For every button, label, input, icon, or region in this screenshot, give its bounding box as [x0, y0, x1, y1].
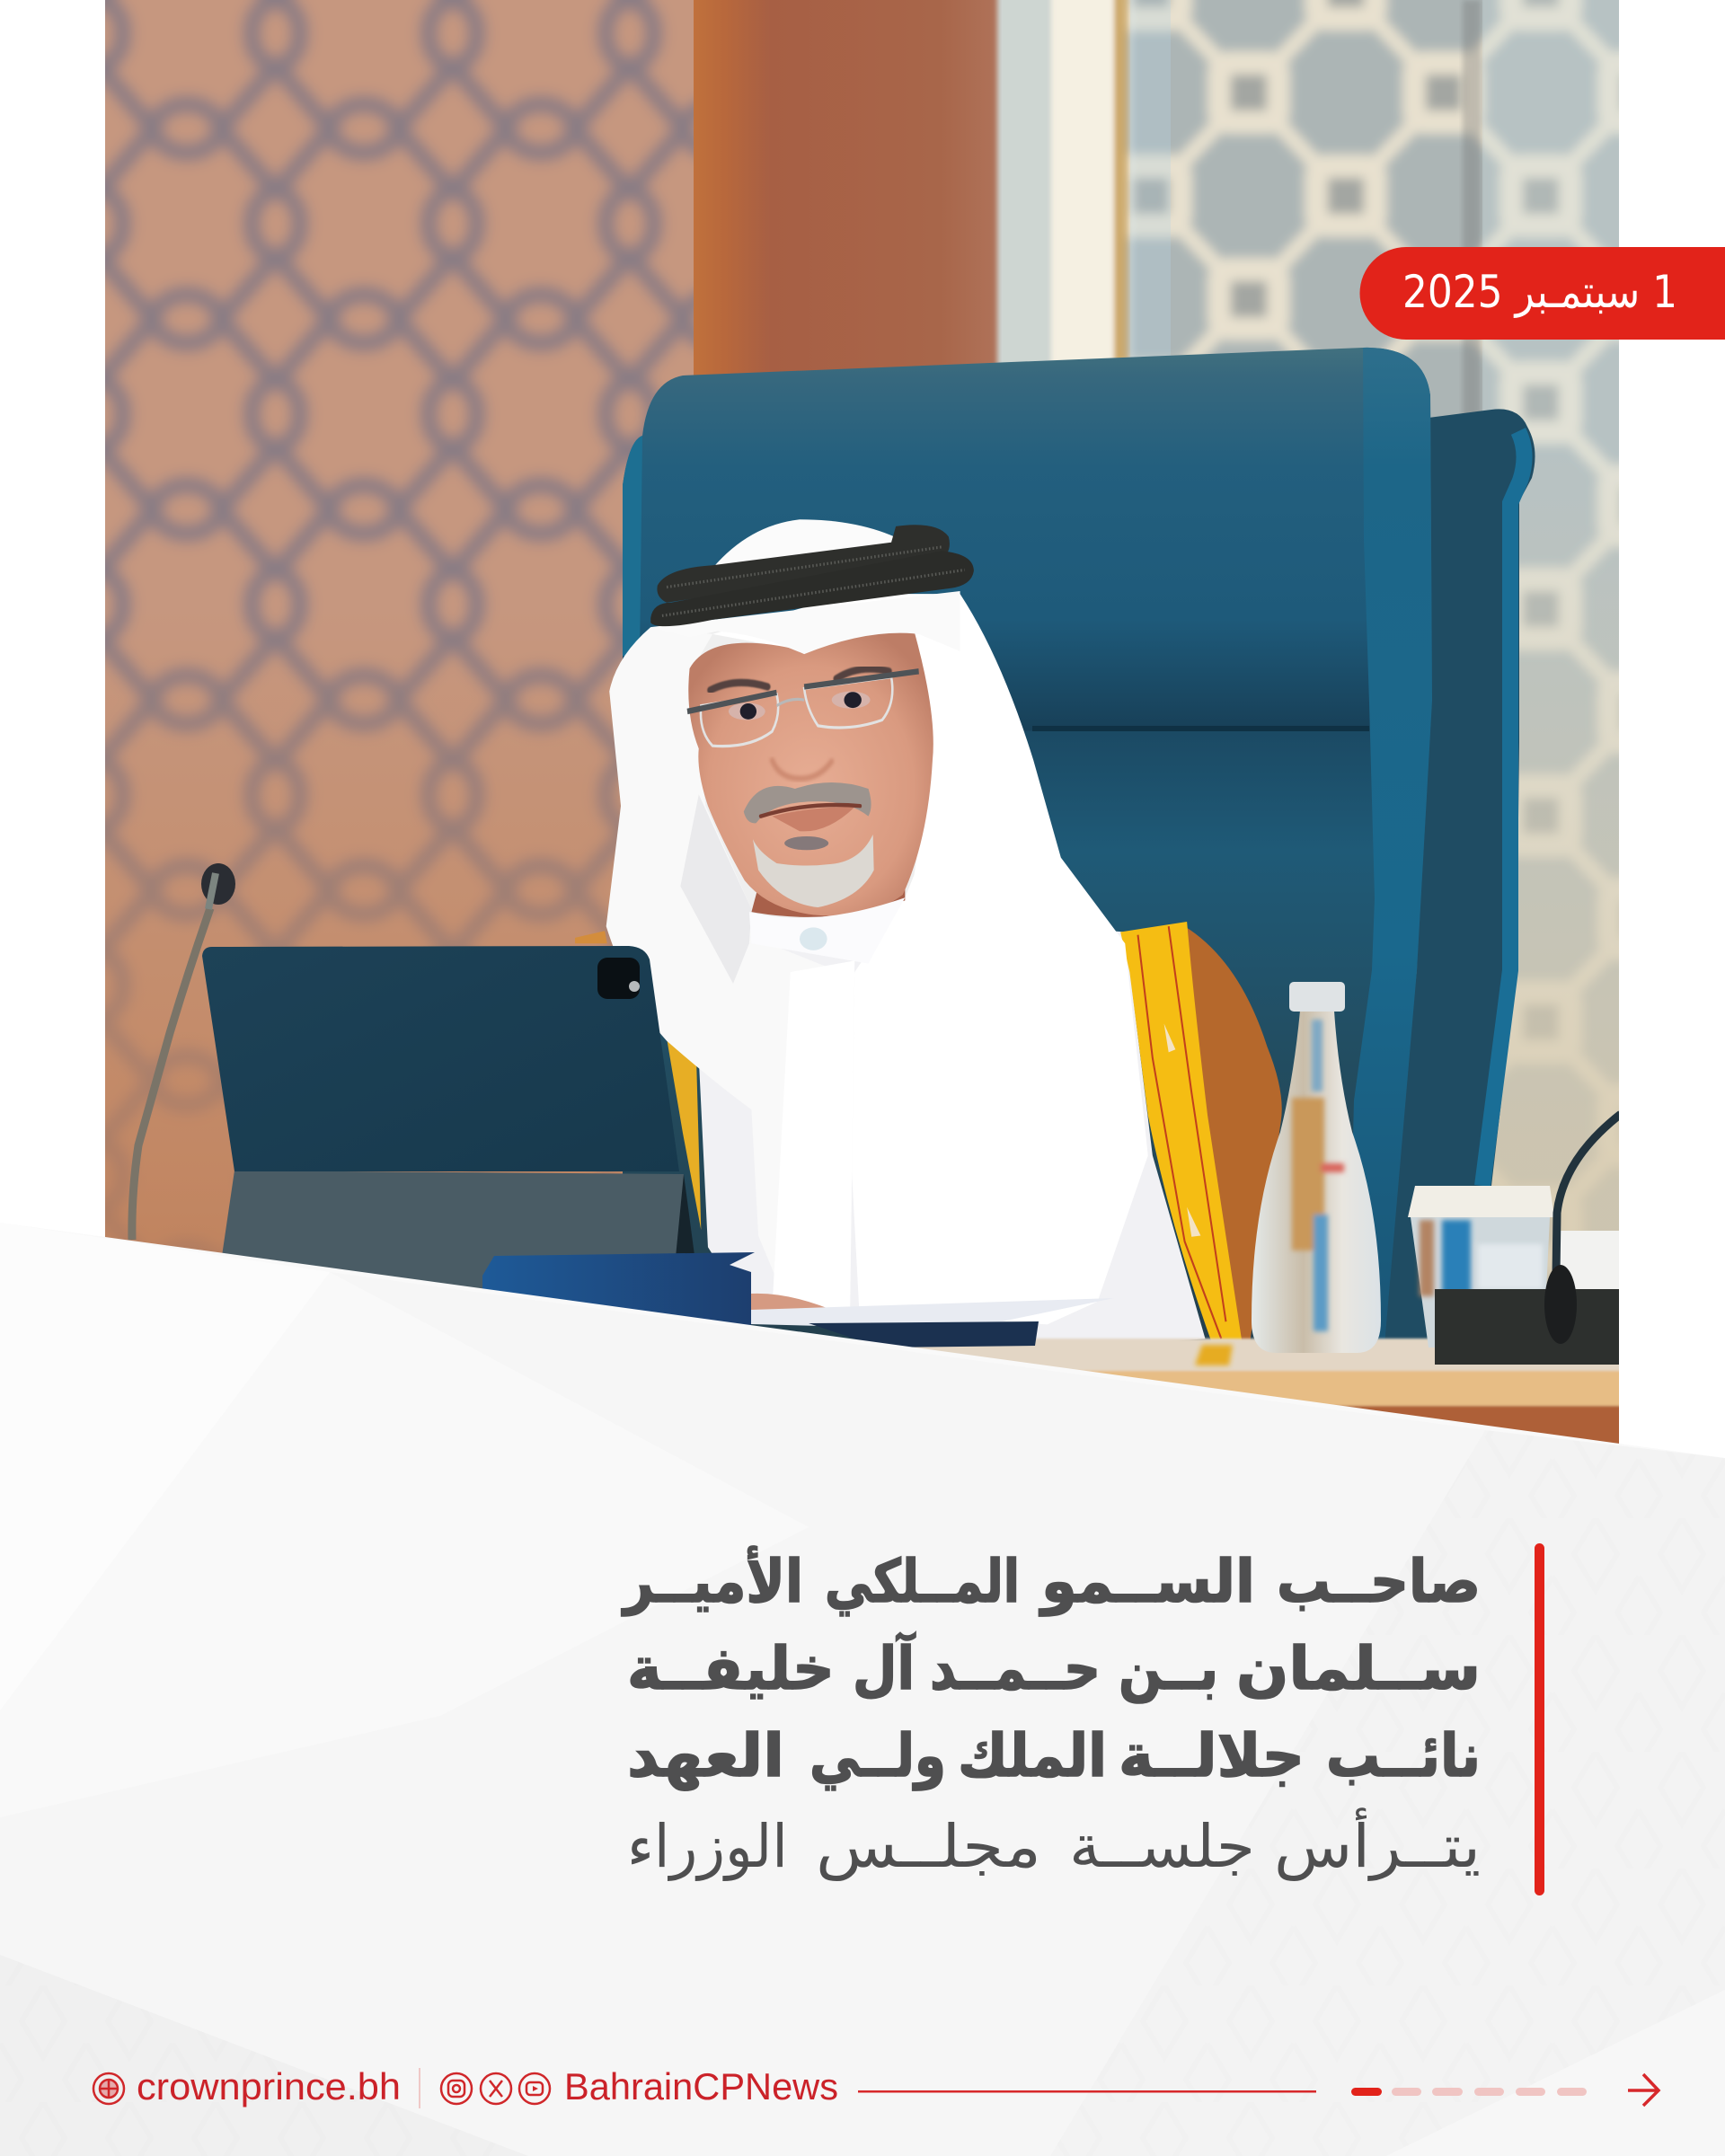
folder: [482, 1252, 755, 1331]
headline line 4: جلســة: [1069, 1812, 1255, 1881]
dark folder on table: [809, 1321, 1039, 1348]
icon: youtube: [519, 2073, 550, 2104]
bisht: gold embroidery right: [1120, 922, 1242, 1350]
red accent bar: [1535, 1543, 1544, 1895]
mouth line: [761, 805, 860, 817]
website: crownprince.bh: [137, 2065, 401, 2107]
table objects: [132, 863, 1626, 1460]
moustache: [744, 782, 871, 823]
papers: [751, 1298, 1114, 1330]
icon: instagram: [441, 2073, 472, 2104]
neck: [751, 886, 905, 917]
headline line 4: [627, 1807, 1481, 1881]
chair side wing: [1375, 409, 1535, 1356]
iqal: black head cord: [650, 525, 974, 626]
glass: [1408, 1186, 1554, 1348]
wall: blurred brown lattice: [105, 0, 694, 1253]
headline line 3: نائــب: [1326, 1721, 1481, 1790]
thobe front placket: [772, 960, 854, 1310]
face: [688, 629, 933, 916]
water bottle: [1252, 982, 1381, 1353]
headline line 4: مجلــس: [816, 1812, 1041, 1881]
date badge: [1360, 247, 1725, 340]
eyes: [729, 692, 871, 720]
goatee: [784, 836, 828, 850]
nose: [772, 760, 832, 779]
headline line 2: آل: [853, 1631, 916, 1703]
headline line 3: العهد: [627, 1721, 784, 1791]
ghutra: forehead fold: [650, 591, 960, 654]
divider: [419, 2068, 420, 2108]
ghutra: inner shade: [680, 794, 751, 984]
headline line 2: ســلمان: [1236, 1634, 1481, 1703]
rule: [858, 2090, 1316, 2093]
tablet stand: [208, 1171, 697, 1348]
pagination dots: [1351, 2088, 1587, 2096]
headline line 3: جلالــة: [1119, 1721, 1305, 1790]
arrow: [1628, 2074, 1659, 2106]
executive chair: [623, 348, 1535, 1356]
headline line 2: بــن: [1119, 1634, 1218, 1703]
hand: [751, 1294, 840, 1313]
ghutra: left fall: [606, 627, 854, 1313]
collar: [749, 897, 905, 964]
wall: blurred cream lattice: [1121, 0, 1619, 1286]
headline line 1: الأميــر: [621, 1545, 803, 1616]
headline line 1: المــلكي: [825, 1547, 1020, 1616]
wall: light column and gold trim: [994, 0, 1132, 363]
headline: [621, 1545, 1481, 1881]
headline line 1: [621, 1545, 1481, 1617]
chair cushion seam: [1032, 726, 1369, 731]
bottom panel with faceted background: [0, 1223, 1725, 2156]
thobe: [699, 915, 1206, 1350]
coaster paper: [1559, 1231, 1622, 1290]
bisht: gold embroidery left: [575, 931, 701, 1230]
chin beard: [753, 835, 874, 907]
gold reflection: [1195, 1345, 1233, 1365]
icon: globe: [93, 2073, 124, 2104]
photo: Crown Prince seated in chair: [72, 0, 1650, 1500]
headline line 1: الســمو: [1039, 1547, 1255, 1617]
headline line 1: صاحــب: [1277, 1547, 1481, 1616]
ghutra: crown: [712, 519, 900, 579]
lower lip: [772, 807, 854, 831]
tablet: [202, 946, 679, 1171]
footer: [93, 2065, 1659, 2108]
headline line 2: حــمــد: [930, 1634, 1101, 1703]
headline line 3: [627, 1721, 1481, 1791]
chair left rim: [623, 436, 642, 656]
date text: 1 سبتمـبر 2025: [1402, 266, 1677, 318]
chair back: [623, 348, 1432, 1356]
social handle: BahrainCPNews: [564, 2065, 838, 2107]
ghutra: underlay behind face: [699, 631, 917, 918]
wall: wood column: [694, 0, 1001, 376]
glasses: [687, 671, 919, 747]
microphone base: [1435, 1289, 1623, 1365]
table top: [898, 1339, 1626, 1460]
headline line 4: يتــرأس: [1274, 1807, 1481, 1881]
ghutra: right fall: [712, 594, 1148, 1324]
headline line 3: ولــي: [809, 1721, 946, 1791]
headline line 3: الملك: [958, 1721, 1107, 1790]
eyebrows: [711, 669, 889, 690]
microphone right: [1544, 1114, 1621, 1344]
icon: x: [481, 2073, 511, 2104]
headline line 2: خليفــة: [627, 1634, 835, 1703]
chair right rim: [1348, 348, 1432, 1356]
headline line 2: [627, 1631, 1481, 1703]
person: [575, 519, 1282, 1350]
bisht: brown cloak: [1185, 926, 1282, 1350]
headline line 4: الوزراء: [627, 1812, 788, 1881]
microphone left: [132, 863, 235, 1240]
